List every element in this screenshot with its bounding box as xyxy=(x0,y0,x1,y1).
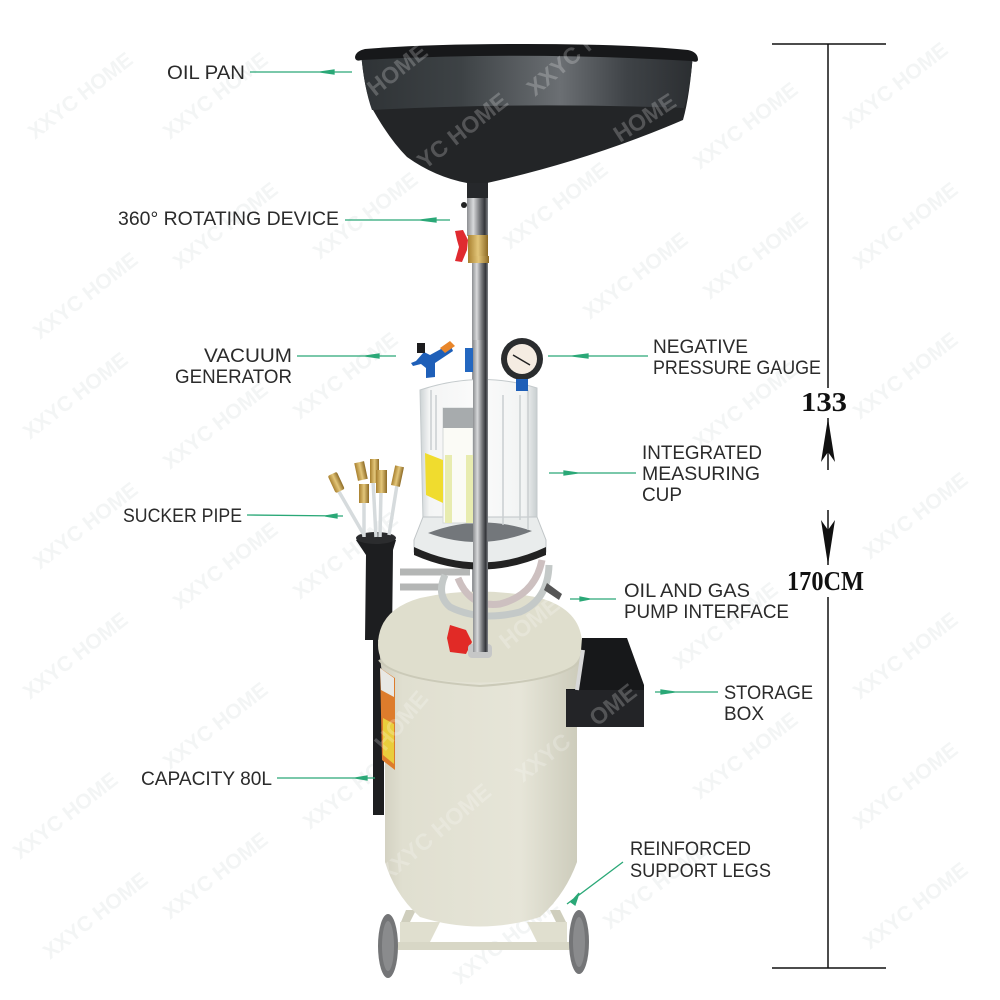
label: pressure gauge xyxy=(653,337,821,379)
object watermarks: HOME xyxy=(362,38,432,101)
watermark pattern: XXYC HOME xyxy=(169,518,282,614)
watermark pattern: XXYC HOME xyxy=(499,158,612,254)
watermark pattern: XXYC HOME xyxy=(159,678,272,774)
watermark pattern: XXYC HOME xyxy=(599,838,712,934)
arrow: support legs xyxy=(567,862,623,905)
labels xyxy=(118,63,821,882)
label: pressure gauge: PRESSURE GAUGE xyxy=(653,358,821,379)
callouts: green arrows xyxy=(247,70,718,905)
oil and gas interface xyxy=(544,583,562,600)
arrow: height down xyxy=(821,520,835,565)
label: measuring cup: MEASURING xyxy=(642,464,760,485)
watermark pattern: XXYC HOME xyxy=(299,738,412,834)
label: vacuum generator: GENERATOR xyxy=(175,367,292,388)
label: support legs xyxy=(630,839,771,882)
watermark pattern: XXYC HOME xyxy=(29,478,142,574)
warning label xyxy=(380,668,395,770)
watermark pattern: XXYC HOME xyxy=(29,248,142,344)
watermark pattern: XXYC HOME xyxy=(689,78,802,174)
wheels and base xyxy=(378,910,589,978)
pipe over cup xyxy=(473,340,488,652)
arrow: rotating device xyxy=(345,218,450,222)
watermark pattern: XXYC HOME xyxy=(579,228,692,324)
object watermarks: XXYC HO xyxy=(522,14,618,101)
object watermarks: XXYC xyxy=(510,728,575,787)
watermark pattern: XXYC HOME xyxy=(669,578,782,674)
label: storage box: STORAGE xyxy=(724,683,813,704)
object watermarks: HOME xyxy=(369,686,433,755)
watermark pattern: XXYC HOME xyxy=(159,828,272,924)
arrow: sucker pipe xyxy=(247,514,343,518)
measuring cup xyxy=(414,379,546,570)
watermark pattern: XXYC HOME xyxy=(39,868,152,964)
label: storage box: BOX xyxy=(724,704,764,725)
object watermarks: HOME xyxy=(609,88,681,147)
hoses xyxy=(400,560,549,616)
watermark pattern: XXYC HOME xyxy=(309,168,422,264)
watermark pattern: XXYC HOME xyxy=(169,178,282,274)
arrow: capacity xyxy=(277,776,375,780)
watermark pattern: XXYC HOME xyxy=(19,608,132,704)
object watermarks: OME xyxy=(584,678,641,731)
dimension: 133: 133 xyxy=(801,387,847,417)
dimension scale xyxy=(772,44,886,968)
watermark pattern: XXYC HOME xyxy=(849,608,962,704)
tank body xyxy=(378,640,582,926)
watermark pattern: XXYC HOME xyxy=(849,178,962,274)
watermark pattern: XXYC HOME xyxy=(19,348,132,444)
tank and hoses xyxy=(378,560,589,978)
watermark pattern: XXYC HOME xyxy=(859,468,972,564)
label: pressure gauge: NEGATIVE xyxy=(653,337,748,358)
arrow: vacuum generator xyxy=(297,354,396,358)
watermark pattern: XXYC HOME xyxy=(689,708,802,804)
label: oil and gas xyxy=(624,581,789,623)
watermark pattern: XXYC HOME xyxy=(839,38,952,134)
label: oil and gas: OIL AND GAS xyxy=(624,581,750,602)
label: measuring cup xyxy=(642,443,762,506)
storage box xyxy=(566,638,644,727)
object watermarks: XXYC HOME xyxy=(374,778,496,887)
pipe: upper swivel and lower tube xyxy=(455,180,489,652)
arrow: oil pan xyxy=(250,70,352,74)
watermark pattern: XXYC HOME xyxy=(699,208,812,304)
label: support legs: SUPPORT LEGS xyxy=(630,861,771,882)
object watermarks: YC HOME xyxy=(412,87,513,174)
dimension: 170CM: 170CM xyxy=(787,566,864,596)
suction pipes and holder xyxy=(328,459,404,815)
arrow: pressure gauge xyxy=(548,354,648,358)
vacuum generator xyxy=(411,341,473,378)
watermark pattern: XXYC HOME xyxy=(289,508,402,604)
watermark pattern: XXYC HOME xyxy=(689,358,802,454)
watermark pattern: XXYC HOME xyxy=(159,48,272,144)
label: vacuum generator: VACUUM xyxy=(204,346,292,367)
label: capacity: CAPACITY 80L xyxy=(141,769,272,790)
label: measuring cup: INTEGRATED xyxy=(642,443,762,464)
negative pressure gauge xyxy=(501,338,543,391)
arrow: storage box xyxy=(655,690,718,694)
arrow: oil and gas xyxy=(570,597,616,601)
watermark pattern: XXYC HOME xyxy=(449,893,562,989)
watermark pattern: XXYC HOME xyxy=(9,768,122,864)
arrow: measuring cup xyxy=(549,471,636,475)
label: oil and gas: PUMP INTERFACE xyxy=(624,602,789,623)
red knob xyxy=(447,625,472,654)
watermark pattern: XXYC HOME xyxy=(159,378,272,474)
label: vacuum generator xyxy=(175,346,292,388)
icon: red butterfly valve xyxy=(455,230,468,262)
oil pan xyxy=(355,44,698,183)
label: storage box xyxy=(724,683,813,725)
watermark pattern: XXYC HOME xyxy=(849,328,962,424)
object watermarks: HOME xyxy=(494,591,564,654)
label: sucker pipe: SUCKER PIPE xyxy=(123,506,242,527)
label: measuring cup: CUP xyxy=(642,485,682,506)
label: oil pan: OIL PAN xyxy=(167,63,245,84)
watermark pattern: XXYC HOME xyxy=(24,48,137,144)
watermark pattern: XXYC HOME xyxy=(849,738,962,834)
watermark pattern: XXYC HOME xyxy=(289,328,402,424)
arrow: height up xyxy=(821,418,835,462)
object watermarks xyxy=(362,14,681,887)
label: rotating device: 360° ROTATING DEVICE xyxy=(118,209,339,230)
tank lid xyxy=(378,592,582,682)
label: support legs: REINFORCED xyxy=(630,839,751,860)
watermark pattern: XXYC HOME xyxy=(859,858,972,954)
